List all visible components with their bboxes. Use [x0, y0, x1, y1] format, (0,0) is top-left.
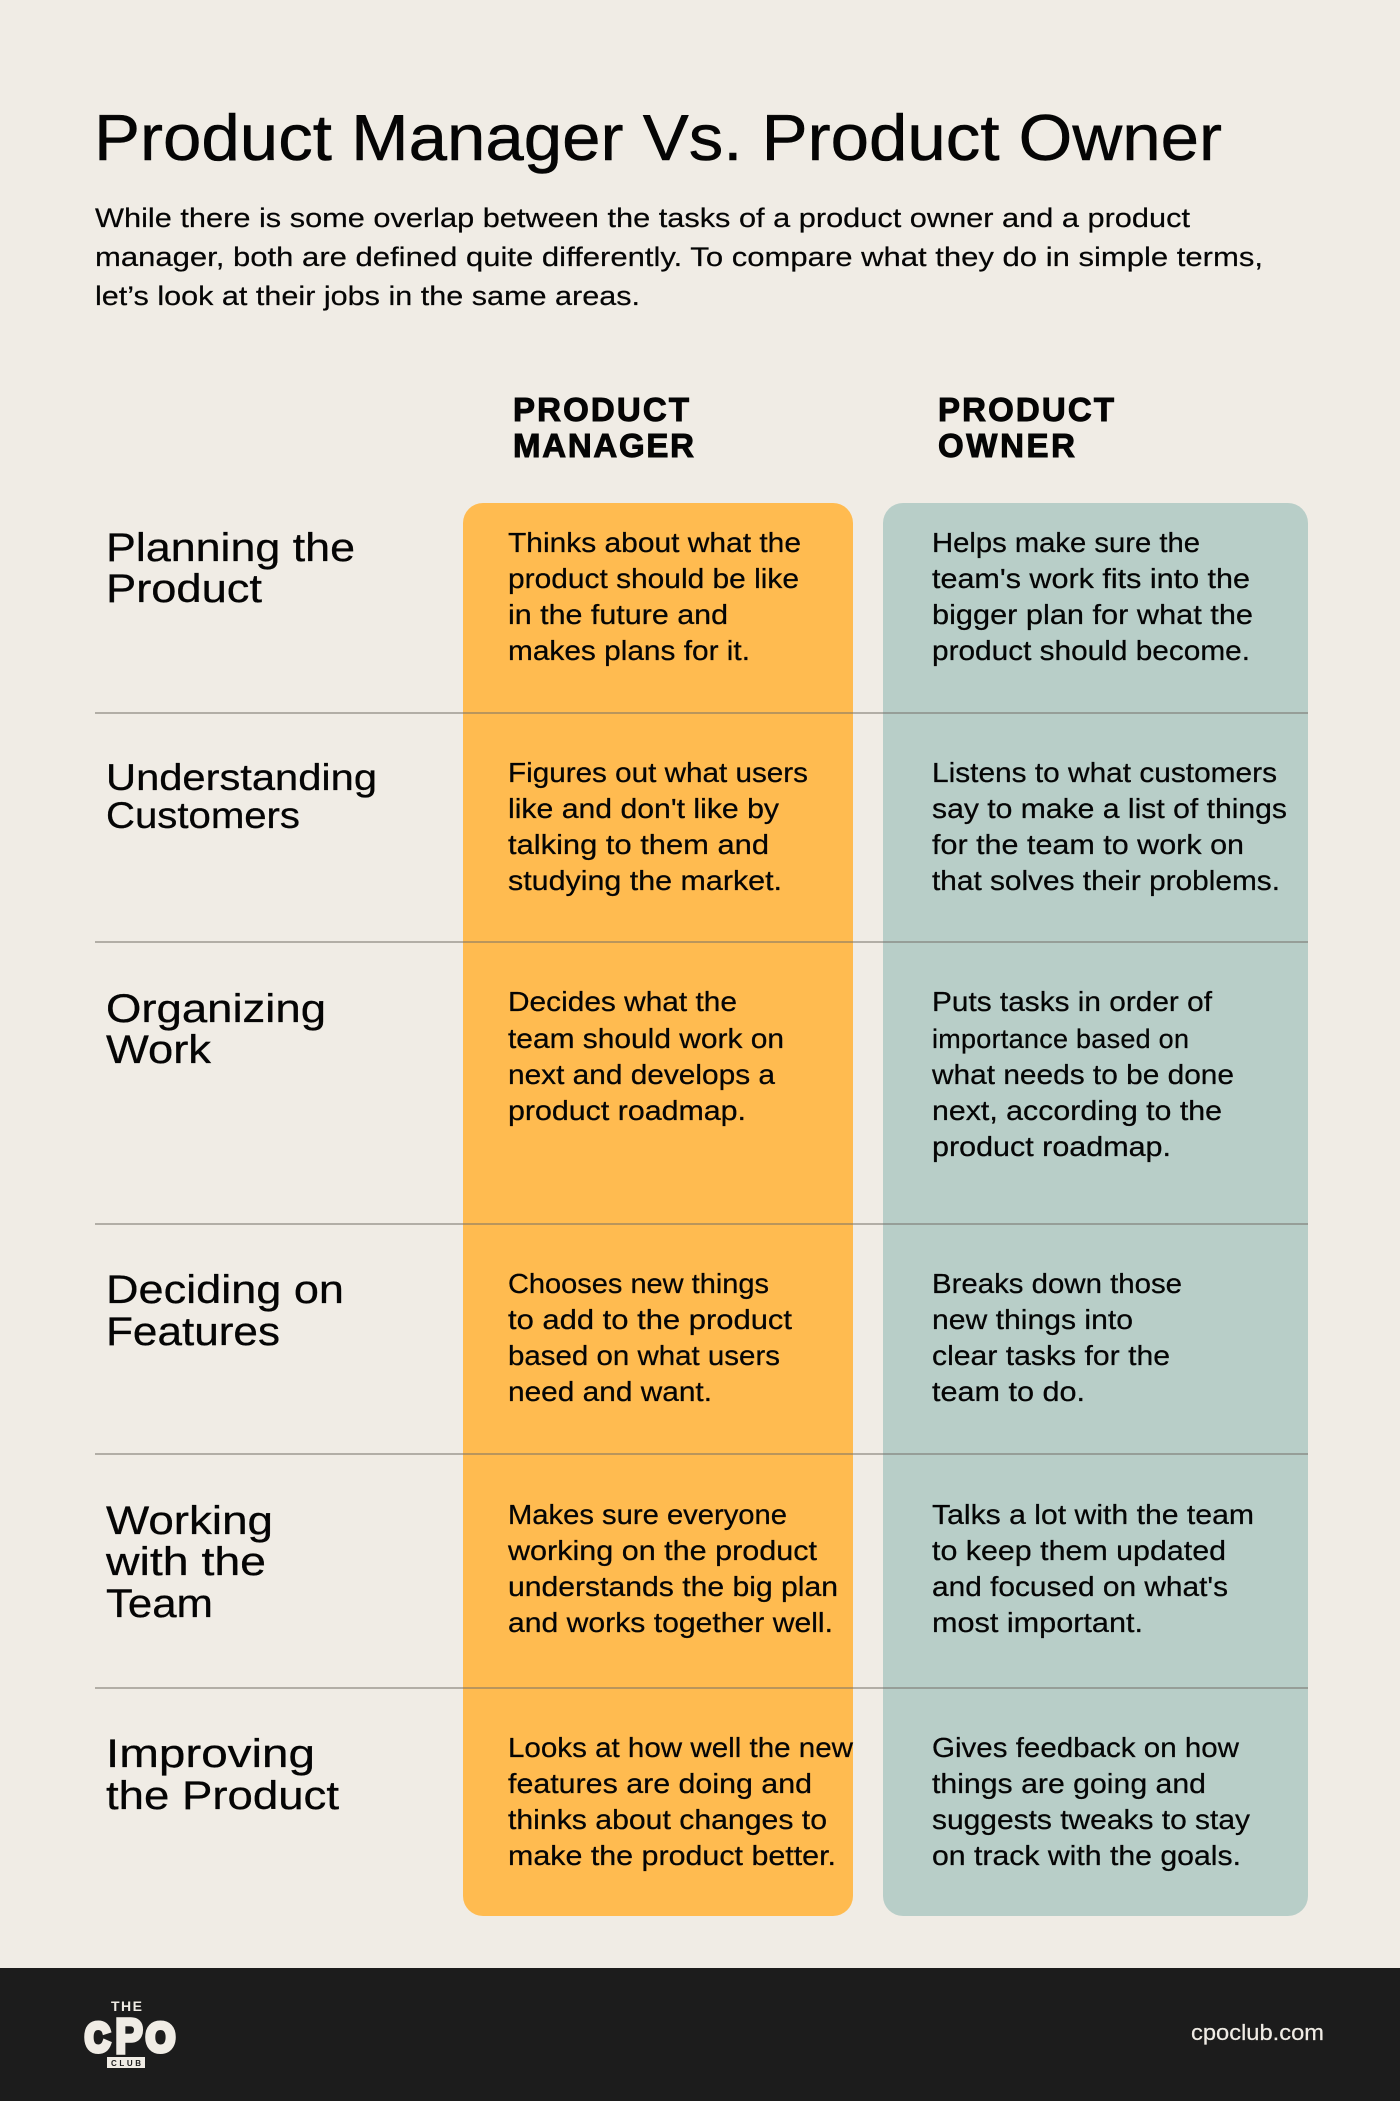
owner text: team	[932, 1499, 1254, 1638]
row label: planning the product	[106, 526, 355, 611]
owner text: features: team to do.	[932, 1376, 1085, 1407]
owner text: customers: that solves their problems.	[932, 865, 1280, 896]
owner text: customers	[932, 757, 1287, 896]
row label: understanding customers	[106, 757, 377, 836]
row label: understanding customers: Customers	[106, 795, 300, 836]
panel: product owner column	[883, 503, 1308, 1916]
manager text: improving: make the product better.	[508, 1840, 836, 1871]
owner text: customers: for the team to work on	[932, 829, 1244, 860]
manager text: features: Chooses new things	[508, 1268, 769, 1299]
owner text: organizing work: importance based on	[932, 1024, 1189, 1054]
manager text: customers	[508, 757, 808, 896]
website url: cpoclub.com	[1191, 2020, 1324, 2045]
manager text: organizing work	[508, 986, 784, 1126]
manager text: team: and works together well.	[508, 1607, 833, 1638]
owner text: planning: Helps make sure the	[932, 527, 1200, 558]
logo: the cpo club: CLUB	[111, 2059, 141, 2068]
manager text: team: working on the product	[507, 1535, 817, 1566]
row label: organizing work: Organizing	[106, 987, 326, 1031]
column heading: product owner	[938, 391, 1114, 464]
manager text: customers: studying the market.	[508, 865, 782, 896]
column heading: product owner: PRODUCT	[938, 391, 1114, 428]
logo: the cpo club: P	[115, 2010, 143, 2064]
column heading: product manager	[513, 391, 694, 464]
manager text: improving: features are doing and	[508, 1768, 812, 1799]
owner text: features	[932, 1268, 1182, 1407]
row label: deciding on features: Features	[106, 1310, 280, 1354]
manager text: customers: talking to them and	[508, 829, 769, 860]
owner text: improving: on track with the goals.	[932, 1840, 1241, 1871]
row label: organizing work	[106, 987, 326, 1072]
row label: deciding on features	[106, 1268, 344, 1354]
manager text: planning: product should be like	[508, 563, 799, 594]
manager text: organizing work: team should work on	[508, 1023, 784, 1054]
manager text: planning: Thinks about what the	[508, 527, 801, 558]
owner text: customers: say to make a list of things	[932, 793, 1287, 824]
column heading: product manager: PRODUCT	[513, 391, 689, 428]
owner text: organizing work	[931, 986, 1234, 1162]
row label: understanding customers: Understanding	[106, 757, 377, 798]
footer bar	[0, 1968, 1400, 2101]
owner text: features: new things into	[932, 1304, 1133, 1335]
manager text: improving	[508, 1732, 854, 1871]
owner text: organizing work: Puts tasks in order of	[932, 986, 1212, 1017]
manager text: planning: in the future and	[508, 599, 728, 630]
intro paragraph: manager, both are defined quite differently. To compare what they do in simple terms,	[95, 242, 1263, 272]
manager text: improving: Looks at how well the new	[508, 1732, 854, 1763]
owner text: team: to keep them updated	[932, 1535, 1226, 1566]
row label: deciding on features: Deciding on	[106, 1268, 344, 1312]
owner text: planning: product should become.	[932, 635, 1250, 666]
owner text: customers: Listens to what customers	[932, 757, 1277, 788]
intro paragraph	[95, 203, 1263, 311]
owner text: improving	[932, 1732, 1250, 1871]
owner text: improving: suggests tweaks to stay	[932, 1804, 1250, 1835]
owner text: organizing work: next, according to the	[932, 1095, 1222, 1126]
manager text: team	[507, 1499, 838, 1638]
manager text: features	[508, 1268, 792, 1407]
owner text: improving: things are going and	[932, 1768, 1206, 1799]
manager text: organizing work: Decides what the	[508, 986, 737, 1017]
owner text: features: Breaks down those	[932, 1268, 1182, 1299]
owner text: team: most important.	[932, 1607, 1143, 1638]
manager text: team: Makes sure everyone	[508, 1499, 787, 1530]
row label: working with the team	[105, 1499, 273, 1626]
row label: planning the product: Planning the	[106, 526, 355, 570]
intro paragraph: let’s look at their jobs in the same areas.	[95, 281, 640, 311]
manager text: features: to add to the product	[508, 1304, 792, 1335]
row label: organizing work: Work	[106, 1028, 212, 1072]
row label: working with the team: Team	[106, 1582, 213, 1626]
title: Product Manager Vs. Product Owner	[94, 101, 1222, 174]
column heading: product owner: OWNER	[938, 427, 1075, 464]
manager text: customers: Figures out what users	[508, 757, 808, 788]
logo: the cpo club: O	[146, 2016, 175, 2060]
owner text: team: and focused on what's	[932, 1571, 1228, 1602]
logo: the cpo club: C	[85, 2016, 110, 2060]
manager text: planning	[508, 527, 801, 666]
column heading: product manager: MANAGER	[513, 427, 694, 464]
owner text: team: Talks a lot with the team	[932, 1499, 1254, 1530]
logo: the cpo club: THE	[111, 1998, 142, 2014]
manager text: organizing work: next and develops a	[508, 1059, 775, 1090]
logo: the cpo club	[85, 1998, 175, 2068]
row label: working with the team: Working	[106, 1499, 273, 1543]
owner text: organizing work: what needs to be done	[931, 1059, 1234, 1090]
manager text: organizing work: product roadmap.	[508, 1095, 746, 1126]
owner text: planning: team's work fits into the	[932, 563, 1250, 594]
intro paragraph: While there is some overlap between the tasks of a product owner and a product	[95, 203, 1191, 233]
owner text: planning	[932, 527, 1253, 666]
owner text: features: clear tasks for the	[932, 1340, 1170, 1371]
row label: improving the product	[106, 1732, 339, 1818]
owner text: organizing work: product roadmap.	[932, 1131, 1171, 1162]
panel: product manager column	[463, 503, 853, 1916]
row label: improving the product: Improving	[106, 1732, 315, 1776]
manager text: planning: makes plans for it.	[508, 635, 750, 666]
manager text: features: need and want.	[508, 1376, 712, 1407]
owner text: improving: Gives feedback on how	[932, 1732, 1240, 1763]
manager text: features: based on what users	[508, 1340, 780, 1371]
owner text: planning: bigger plan for what the	[932, 599, 1253, 630]
manager text: improving: thinks about changes to	[508, 1804, 827, 1835]
row label: working with the team: with the	[105, 1540, 266, 1584]
manager text: team: understands the big plan	[508, 1571, 838, 1602]
row label: improving the product: the Product	[106, 1774, 339, 1818]
manager text: customers: like and don't like by	[508, 793, 779, 824]
row label: planning the product: Product	[106, 567, 262, 611]
